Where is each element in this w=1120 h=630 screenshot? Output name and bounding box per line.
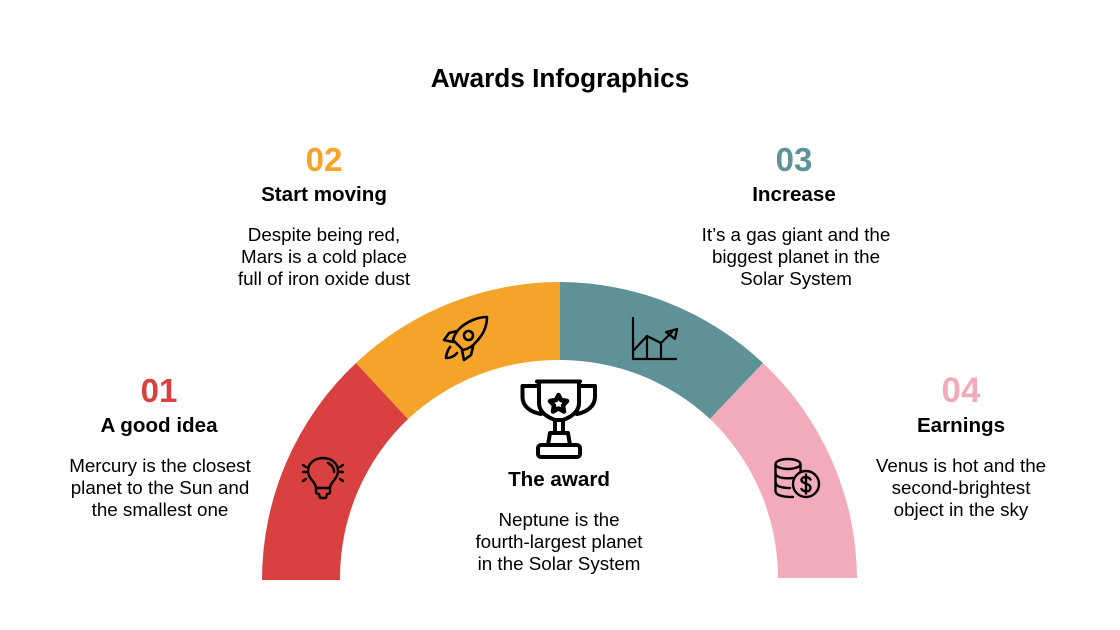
segment: teal [560,282,763,419]
description: a good idea: the smallest one [92,499,228,520]
description: a good idea [69,455,251,520]
number 03: 03 [776,141,812,178]
segment: orange [356,282,560,419]
description: earnings: second-brightest [892,477,1030,498]
description: a good idea: planet to the Sun and [71,477,249,498]
description: the award [475,509,643,574]
icon: growth chart [633,318,677,359]
step 03 text [702,141,890,289]
icon: light bulb [303,458,343,498]
heading: the award: The award [508,468,610,491]
step 02 text [238,141,410,289]
description: the award: in the Solar System [478,553,640,574]
description: start moving: Mars is a cold place [241,246,407,267]
heading: start moving: Start moving [261,183,387,206]
step 04 text [876,371,1046,520]
description: earnings: Venus is hot and the [876,455,1046,476]
description: a good idea: Mercury is the closest [69,455,251,476]
heading: a good idea: A good idea [100,414,218,437]
description: increase: Solar System [740,268,852,289]
icon: coins [776,459,819,497]
description: increase [702,224,890,289]
description: earnings [876,455,1046,520]
segment: red [262,363,408,580]
description: start moving: Despite being red, [248,224,400,245]
heading: earnings: Earnings [917,414,1005,437]
description: increase: biggest planet in the [712,246,880,267]
step 01 text [69,372,251,520]
description: increase: It’s a gas giant and the [702,224,890,245]
number 01: 01 [141,372,177,409]
description: the award: Neptune is the [498,509,620,530]
description: start moving [238,224,410,289]
icon: trophy [522,382,595,457]
center text: the award [475,468,643,574]
number 02: 02 [306,141,342,178]
number 04: 04 [942,371,980,410]
description: the award: fourth-largest planet [475,531,643,552]
icon: rocket [444,317,487,360]
heading: increase: Increase [752,183,836,206]
description: start moving: full of iron oxide dust [238,268,410,289]
title: Awards Infographics [431,63,689,93]
description: earnings: object in the sky [894,499,1028,520]
segment: pink [710,363,857,578]
